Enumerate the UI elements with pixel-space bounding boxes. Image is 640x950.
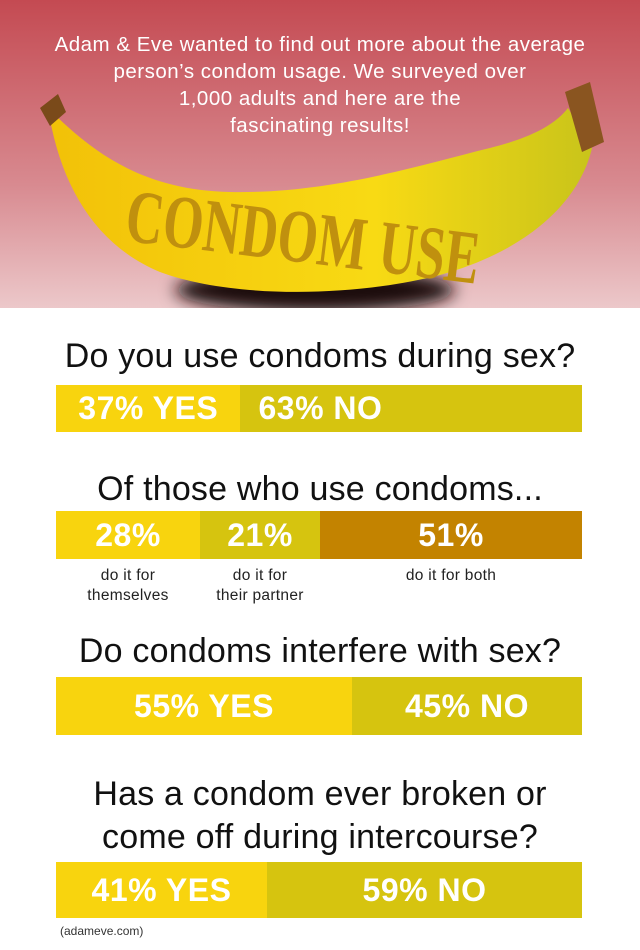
intro text (54, 33, 585, 137)
question 2 heading: Of those who use condoms... (97, 470, 543, 508)
question 3 heading: Do condoms interfere with sex? (79, 632, 561, 670)
question 4 heading (93, 775, 547, 856)
bar 2: 51% (418, 516, 484, 552)
bar 3: 55% YES (134, 688, 274, 724)
banana label: CONDOM USE (121, 174, 485, 301)
label partner: do it for (233, 567, 287, 584)
question 4 heading: come off during intercourse? (102, 818, 538, 856)
label both: do it for both (406, 567, 496, 584)
banana illustration (40, 82, 604, 308)
bar 1: 37% YES (78, 390, 218, 426)
label partner (216, 567, 304, 604)
label themselves: do it for (101, 567, 155, 584)
bar 2: 21% (227, 516, 293, 552)
header banner (0, 0, 640, 308)
label themselves: themselves (87, 587, 169, 604)
intro text: person’s condom usage. We surveyed over (113, 60, 526, 83)
bar 4 (56, 862, 582, 918)
bar 1 (56, 385, 582, 432)
bar 2: 28% (95, 516, 161, 552)
bar 2 labels (87, 567, 496, 604)
bar 1: 63% NO (258, 390, 382, 426)
intro text: 1,000 adults and here are the (179, 87, 461, 110)
intro text: Adam & Eve wanted to find out more about the average (55, 33, 585, 56)
intro text: fascinating results! (230, 114, 410, 137)
question 4 heading: Has a condom ever broken or (93, 775, 547, 813)
banana body (48, 108, 592, 292)
bar 3: 45% NO (405, 688, 529, 724)
source: (adameve.com) (60, 924, 143, 938)
shadow (175, 268, 455, 312)
bar 4: 59% NO (363, 872, 486, 908)
bar 2 (56, 511, 582, 559)
label themselves (87, 567, 169, 604)
label partner: their partner (216, 587, 304, 604)
question 1 heading: Do you use condoms during sex? (65, 337, 575, 375)
stems (40, 94, 66, 126)
bar 3 (56, 677, 582, 735)
bar 4: 41% YES (92, 872, 231, 908)
